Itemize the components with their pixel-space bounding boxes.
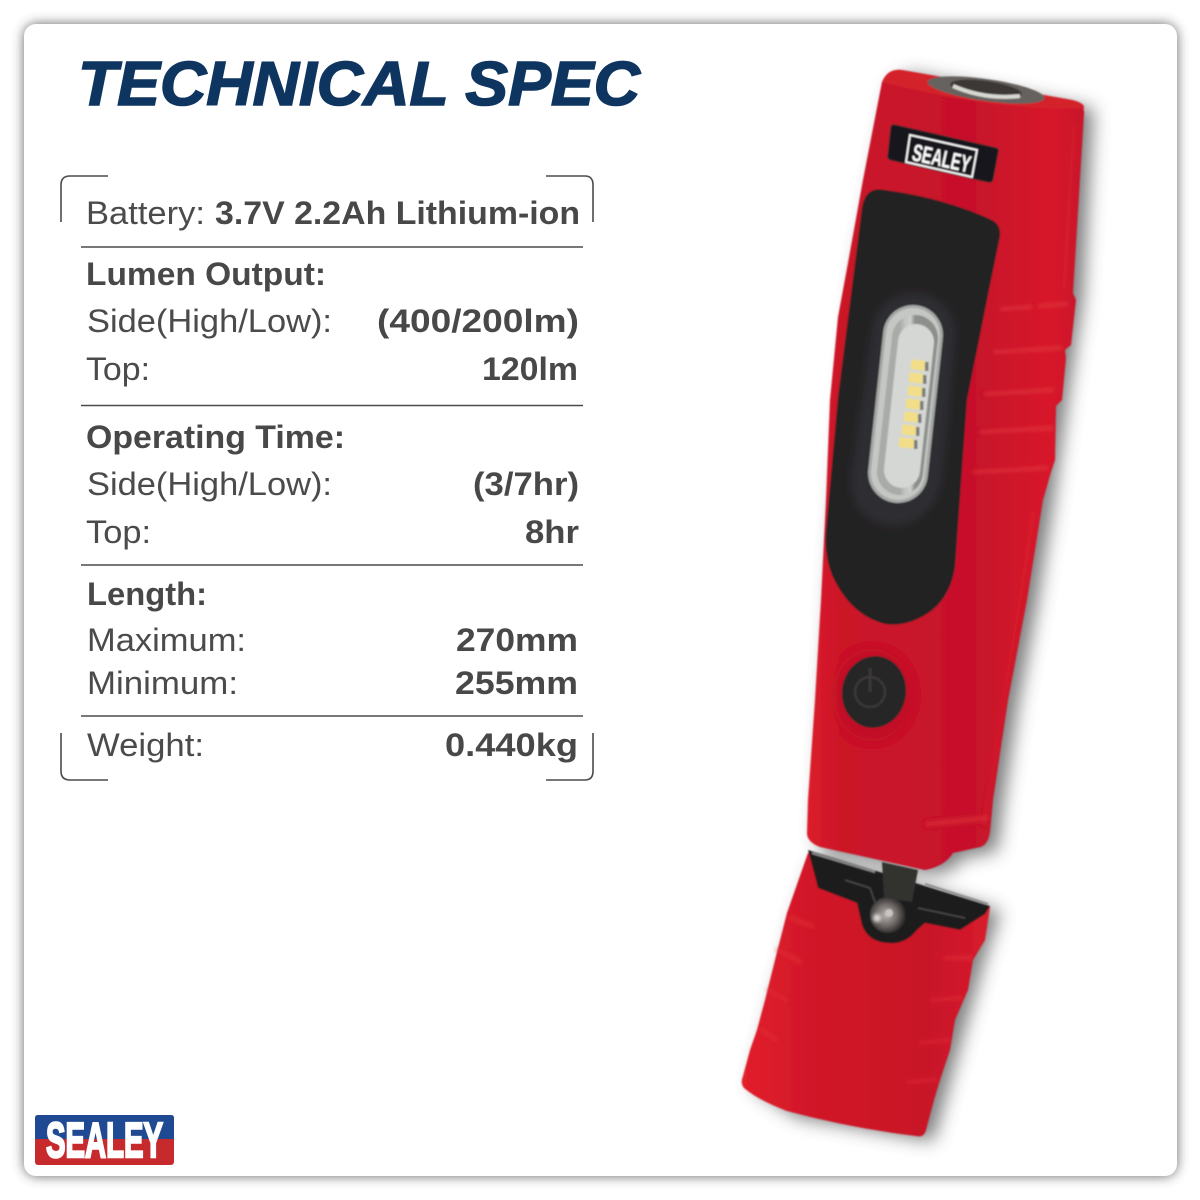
recess around lens (851, 293, 955, 525)
weight row: Weight: (87, 727, 204, 763)
weight row: 0.440kg (445, 727, 578, 763)
battery row: Battery: (86, 195, 205, 231)
black lamp panel (826, 189, 1000, 625)
body rib highlights (928, 304, 1066, 824)
operating time group: Operating Time: (86, 419, 345, 455)
top face (882, 70, 1084, 108)
LED chips (898, 359, 926, 449)
handle grip ribs (762, 918, 970, 1082)
logo badge on lamp (888, 125, 998, 182)
lumen output group: Side(High/Low): (87, 303, 332, 339)
lumen output group: (400/200lm) (377, 303, 579, 339)
weight row (87, 727, 578, 763)
corner brackets (61, 176, 593, 780)
brand logo: SEALEY: SEALEY (46, 1114, 163, 1168)
right edge sheen (984, 125, 1074, 825)
top lens (949, 76, 1023, 102)
lumen output group: Lumen Output: (86, 256, 326, 292)
length group: Length: (87, 576, 207, 612)
lumen output group: Top: (86, 351, 150, 387)
operating time group: (3/7hr) (473, 466, 579, 502)
brand logo: SEALEY (35, 1114, 174, 1168)
length group: 270mm (456, 622, 578, 658)
power button (832, 649, 912, 741)
panel: specification table (61, 176, 593, 780)
operating time group: 8hr (525, 514, 579, 550)
battery row (86, 195, 580, 231)
side COB lens (898, 335, 928, 473)
lumen output group (86, 256, 579, 387)
ball joint (870, 897, 906, 933)
logo badge on lamp: SEALEY (910, 139, 973, 179)
operating time group: Side(High/Low): (87, 466, 332, 502)
length group: 255mm (455, 665, 578, 701)
length group: Maximum: (87, 622, 246, 658)
operating time group (86, 419, 579, 550)
main body (807, 70, 1084, 870)
black hinge bracket (808, 850, 990, 943)
top lens ring (926, 71, 1046, 109)
product photo: inspection lamp (742, 70, 1093, 1141)
length group: Minimum: (87, 665, 238, 701)
length group (87, 576, 578, 701)
lumen output group: 120lm (482, 351, 578, 387)
product shadow (752, 74, 1093, 1141)
operating time group: Top: (86, 514, 151, 550)
title: TECHNICAL SPEC (78, 50, 641, 119)
lower handle (742, 850, 990, 1136)
swivel stem (882, 862, 918, 902)
battery row: 3.7V 2.2Ah Lithium-ion (215, 195, 580, 231)
